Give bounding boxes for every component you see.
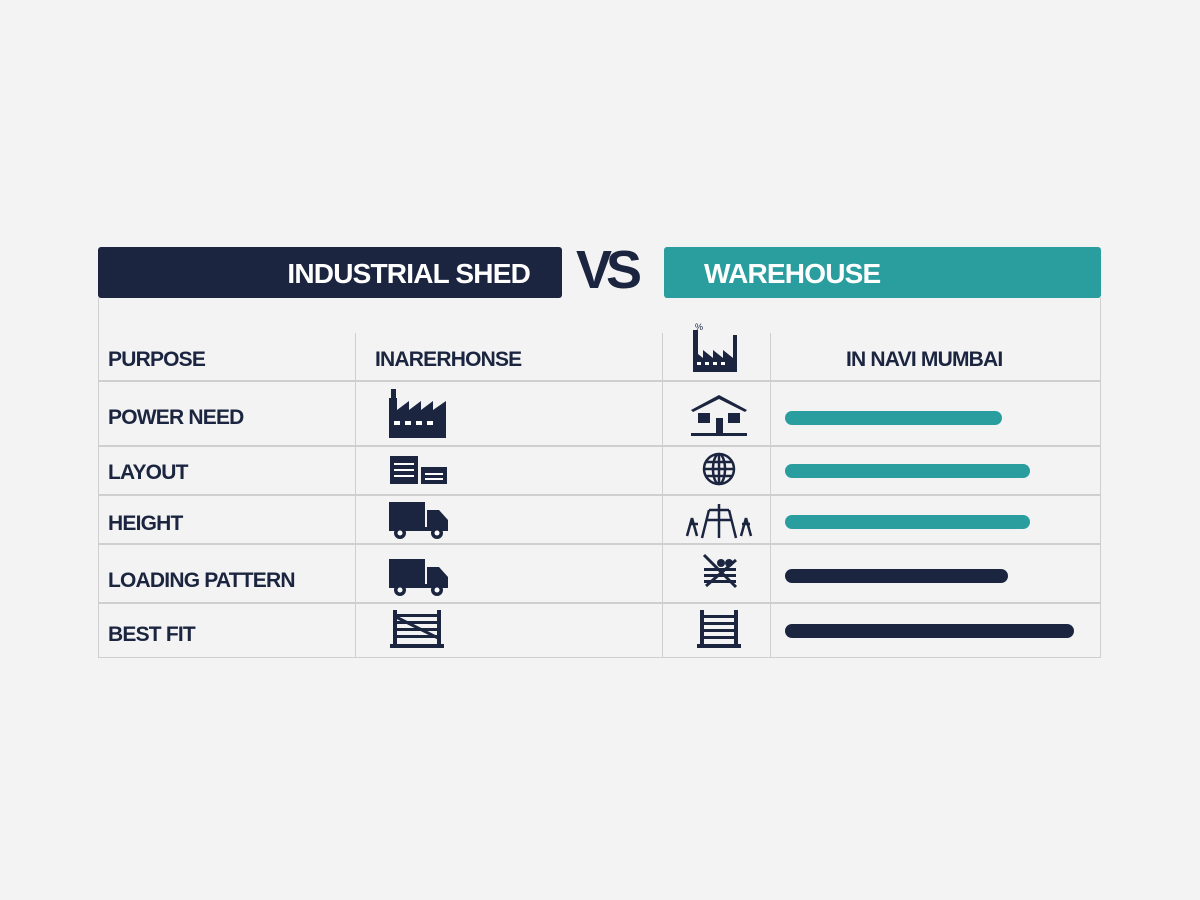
icon: layout — [390, 456, 447, 484]
header: warehouse: WAREHOUSE — [704, 258, 880, 289]
row labels: BEST FIT — [108, 623, 195, 646]
row labels: PURPOSE — [108, 348, 205, 371]
comparison table — [98, 298, 1101, 658]
header: industrial shed: INDUSTRIAL SHED — [287, 258, 530, 289]
icon: rack — [697, 610, 741, 648]
icon: crossed load — [704, 555, 736, 587]
icon: factory — [389, 389, 446, 438]
bar: power need — [785, 411, 1002, 425]
bar: layout — [785, 464, 1030, 478]
icon: truck height — [389, 502, 448, 539]
bar: best fit — [785, 624, 1074, 638]
bar: loading pattern — [785, 569, 1008, 583]
icon: factory header — [693, 322, 737, 372]
row labels: LAYOUT — [108, 461, 188, 484]
icon: warehouse — [691, 395, 747, 436]
icon: pylons — [687, 504, 751, 538]
icon: truck loading — [389, 559, 448, 596]
row labels — [108, 348, 295, 646]
bar: height — [785, 515, 1030, 529]
header: industrial shed — [98, 247, 562, 298]
navi mumbai text: IN NAVI MUMBAI — [846, 348, 1002, 371]
header: warehouse — [664, 247, 1101, 298]
purpose text: INARERHONSE — [375, 348, 521, 371]
icon: factory header: % — [695, 322, 703, 332]
bars — [785, 411, 1074, 638]
vs label: VS — [576, 240, 636, 300]
row labels: LOADING PATTERN — [108, 569, 295, 592]
icon: globe — [704, 454, 734, 484]
row labels: HEIGHT — [108, 512, 183, 535]
icon: gate crossed — [390, 610, 444, 648]
row labels: POWER NEED — [108, 406, 244, 429]
